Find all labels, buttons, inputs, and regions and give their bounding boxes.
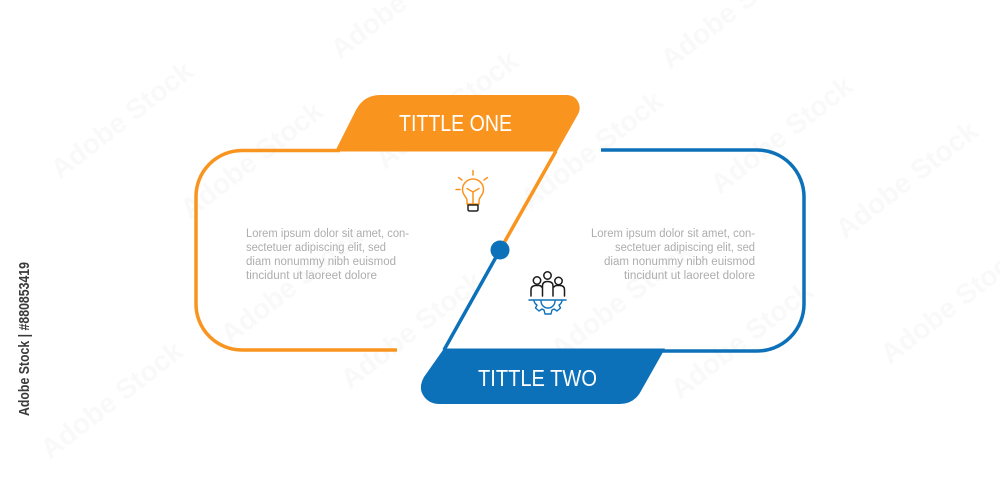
text: Adobe Stock — [370, 45, 524, 175]
text block: right description: Lorem ipsum dolor sit amet, con- — [591, 228, 755, 240]
text block: left description — [246, 228, 409, 282]
text: Adobe Stock — [175, 95, 329, 225]
orange diagonal connector — [500, 151, 556, 250]
text: Adobe Stock — [515, 85, 669, 215]
text: Adobe Stock — [705, 70, 859, 200]
text: Adobe Stock — [665, 275, 819, 405]
text block: left description: Lorem ipsum dolor sit amet, con- — [246, 228, 409, 240]
text: Adobe Stock — [45, 55, 199, 185]
panel: blue outline — [444, 150, 804, 351]
text block: left description: tincidunt ut laoreet dolore — [246, 270, 377, 282]
text: Adobe Stock — [335, 265, 489, 395]
stock credit: Adobe Stock | #880853419 — [16, 262, 33, 416]
text block: right description — [591, 228, 755, 282]
center dot — [490, 240, 510, 260]
text: Adobe Stock — [545, 235, 699, 365]
blue diagonal connector — [444, 250, 500, 350]
text block: left description: sectetuer adipiscing elit, sed — [246, 242, 386, 254]
text: Adobe Stock — [215, 220, 369, 350]
heading: tittle one: TITTLE ONE — [399, 110, 512, 136]
icon: team with gear — [529, 272, 566, 314]
text block: right description: tincidunt ut laoreet dolore — [624, 270, 755, 282]
blue title banner — [421, 348, 665, 404]
text block: right description: sectetuer adipiscing elit, sed — [615, 242, 755, 254]
heading: tittle two: TITTLE TWO — [478, 365, 597, 391]
orange title banner — [335, 95, 580, 152]
icon: light bulb — [456, 170, 488, 211]
text block: left description: diam nonummy nibh euismod — [246, 256, 396, 268]
text: Adobe Stock — [35, 335, 189, 465]
panel: orange outline — [196, 150, 556, 350]
text: Adobe Stock — [830, 115, 984, 245]
text block: right description: diam nonummy nibh euismod — [604, 256, 755, 268]
